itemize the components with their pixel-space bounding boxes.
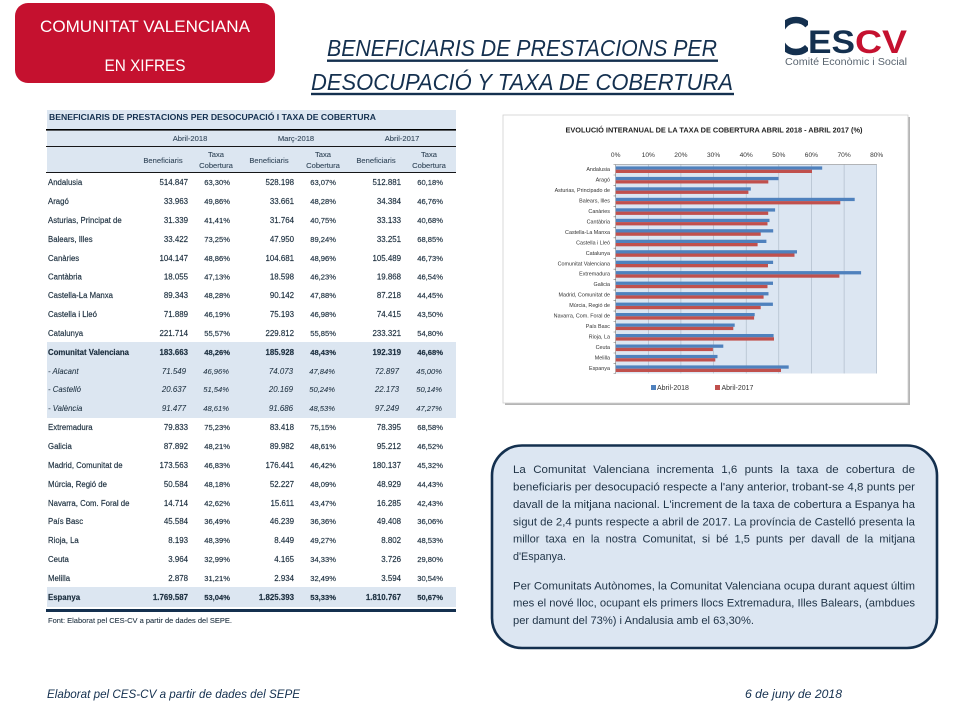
table rows: 46,23% [310, 272, 336, 282]
panel: bar chart [503, 115, 910, 405]
commentary paragraph 2 [513, 580, 915, 627]
table rows: 71.549 [162, 367, 187, 376]
table rows: 32,49% [310, 574, 336, 583]
table rows: 22.173 [374, 385, 400, 394]
table rows: 34.384 [377, 197, 402, 206]
table column headers: Taxa [421, 150, 438, 159]
table rows: 89.343 [164, 291, 189, 300]
table rows: 48,18% [204, 480, 230, 489]
table column headers: Beneficiaris [143, 156, 183, 165]
table rows: Comunitat Valenciana [48, 348, 130, 357]
table rows: 18.055 [164, 272, 189, 282]
table rows: Balears, Illes [48, 235, 93, 244]
table rows: 46,96% [203, 367, 229, 376]
table rows: 55,85% [310, 329, 336, 338]
logo: CES-CV: Comité Econòmic i Social [785, 57, 907, 68]
table rows: 104.681 [265, 254, 294, 263]
table rows: 63,07% [310, 178, 336, 187]
chart category labels: Andalusia [586, 167, 610, 173]
table rows: 48,43% [310, 348, 336, 357]
table rows: 74.415 [377, 310, 402, 319]
table rows: Canàries [48, 254, 79, 263]
table rows: 72.897 [375, 367, 400, 376]
title: DESOCUPACIÓ Y TAXA DE COBERTURA [311, 69, 733, 95]
table rows: 1.825.393 [259, 593, 295, 602]
table rows: 50,67% [417, 593, 443, 602]
table rows: 3.726 [381, 555, 402, 564]
title: BENEFICIARIS DE PRESTACIONS PER [327, 35, 717, 61]
table rows: 1.769.587 [153, 593, 189, 602]
table column headers: Taxa [315, 150, 332, 159]
table rows: 48,26% [204, 348, 230, 357]
table rows: 528.198 [265, 178, 295, 187]
chart axis labels: 20% [674, 152, 688, 159]
badge: Comunitat Valenciana en xifres: COMUNITAT VALENCIANA [40, 17, 251, 36]
chart axis labels [611, 152, 883, 159]
table rows: 221.714 [159, 329, 189, 338]
table rows: 95.212 [377, 442, 401, 451]
table rows: 46,73% [417, 254, 443, 263]
chart category labels [554, 167, 610, 372]
table column headers: Beneficiaris [249, 156, 289, 165]
highlight band: Comunitat Valenciana [47, 342, 456, 418]
chart category labels: Canàries [588, 209, 610, 215]
highlight band: Espanya [47, 587, 456, 607]
table rows: 4.165 [274, 555, 295, 564]
chart category labels: Navarra, Com. Foral de [554, 314, 610, 320]
table rows: 68,85% [417, 235, 443, 244]
table rows: 89.982 [270, 442, 294, 451]
table rows: 31.764 [270, 216, 295, 225]
table column headers: Cobertura [306, 161, 341, 170]
chart category labels: Melilla [595, 356, 610, 362]
table rows: 33.661 [270, 197, 294, 206]
table rows: 18.598 [270, 272, 295, 282]
chart axis labels: 80% [870, 152, 883, 159]
table rows: 74.073 [269, 367, 294, 376]
table rows: 233.321 [372, 329, 401, 338]
footer: date: 6 de juny de 2018 [745, 687, 842, 701]
table rows: 36,36% [310, 517, 336, 526]
table rows: 42,62% [204, 499, 230, 508]
chart category labels: Aragó [596, 178, 610, 184]
table rows: 192.319 [372, 348, 402, 357]
chart axis labels: 10% [642, 152, 655, 159]
table heading: BENEFICIARIS DE PRESTACIONS PER DESOCUPACIÓ I TAXA DE COBERTURA [49, 111, 376, 122]
table rows: 46,19% [204, 310, 230, 319]
table column headers: Abril-2018 [173, 134, 207, 143]
table rows: 176.441 [265, 461, 294, 470]
table rows: 46,54% [417, 272, 443, 282]
table rows [48, 178, 443, 602]
table rows: 8.449 [274, 536, 295, 545]
table rows: 48,86% [204, 254, 230, 263]
table rows: 40,68% [417, 216, 443, 225]
table rows: 43,50% [417, 310, 443, 319]
table rows: Aragó [48, 197, 69, 206]
table rows: 47,88% [310, 291, 336, 300]
chart axis labels: 0% [611, 152, 621, 159]
table rows: 49.408 [377, 517, 402, 526]
table rows: 20.637 [161, 385, 187, 394]
table rows: 52.227 [270, 480, 294, 489]
table rows: Espanya [48, 593, 81, 602]
table rows: Catalunya [48, 329, 84, 338]
panel: commentary text box [492, 446, 937, 648]
table rows: Andalusia [48, 178, 83, 187]
table column headers: Cobertura [412, 161, 447, 170]
chart category labels: Múrcia, Regió de [569, 303, 610, 309]
table rows: 75,15% [310, 423, 336, 432]
table rows: Ceuta [48, 555, 69, 564]
table heading [47, 110, 456, 129]
chart axis labels: 50% [772, 152, 786, 159]
badge: Comunitat Valenciana en xifres: EN XIFRES [104, 56, 186, 75]
commentary paragraph 2: Per Comunitats Autònomes, la Comunitat Valenciana ocupa durant aquest últim [513, 580, 915, 592]
table rows: 36,06% [417, 517, 443, 526]
table rows: 44,45% [417, 291, 443, 300]
chart category labels: Asturias, Principado de [555, 188, 610, 194]
table column headers: Abril-2017 [385, 134, 419, 143]
table rows: 8.193 [168, 536, 189, 545]
table rows: Múrcia, Regió de [48, 480, 107, 489]
table rows: 75,23% [204, 423, 230, 432]
commentary paragraph 2: mes el nové lloc, ocupant els primers llocs Extremadura, Illes Balears, (ambdues [513, 598, 915, 610]
commentary paragraph 1 [513, 464, 916, 563]
table rows: Cantàbria [48, 272, 82, 282]
table column headers: Beneficiaris [356, 156, 396, 165]
table rows: 48,09% [310, 480, 336, 489]
table rows: 46,98% [310, 310, 336, 319]
table rows: 55,57% [204, 329, 230, 338]
table rows: 46.239 [270, 517, 295, 526]
table column headers: Març-2018 [278, 134, 314, 143]
table rows: 33.251 [377, 235, 401, 244]
table rows: 29,80% [417, 555, 443, 564]
table rows: 173.563 [159, 461, 189, 470]
table rows: Castella-La Manxa [48, 291, 114, 300]
table rows: - Alacant [48, 367, 79, 376]
table rows: 8.802 [381, 536, 401, 545]
table rows: 19.868 [377, 272, 402, 282]
table rows: 97.249 [375, 404, 400, 413]
chart legend: Abril-2018 [657, 385, 689, 392]
table rows: 48,21% [204, 442, 230, 451]
table rows: Rioja, La [48, 536, 79, 545]
table rows: 44,43% [417, 480, 443, 489]
table rows: 53,04% [204, 593, 230, 602]
chart category labels: Balears, Illes [579, 198, 610, 204]
table rows: 48,28% [310, 197, 336, 206]
table rows: 16.285 [377, 499, 402, 508]
table rows: 33.133 [377, 216, 402, 225]
commentary paragraph 2: per damunt del 73%) i Andalusia amb el 63,30%. [513, 615, 754, 627]
table rows: 50,14% [416, 385, 442, 394]
table rows: Madrid, Comunitat de [48, 461, 123, 470]
table rows: 68,58% [417, 423, 443, 432]
table rows: 31.339 [164, 216, 189, 225]
table rows: 180.137 [372, 461, 401, 470]
chart category labels: Cantàbria [587, 219, 610, 225]
table rows: 48,61% [310, 442, 336, 451]
table rows: 48,53% [309, 404, 335, 413]
table rows: 42,43% [417, 499, 443, 508]
table rows: 50.584 [164, 480, 189, 489]
commentary paragraph 1: beneficiaris per desocupació respecte a l'any anterior, trobant-se 4,8 punts per [513, 482, 915, 494]
table rows: 90.142 [270, 291, 294, 300]
chart bars: Abril-2018 [616, 166, 861, 369]
table rows: 51,54% [203, 385, 229, 394]
chart category labels: Madrid, Comunitat de [558, 293, 610, 299]
table rows: 105.489 [372, 254, 402, 263]
logo: CES-CV: CV [855, 24, 908, 60]
chart category labels: País Basc [586, 324, 610, 330]
table rows: 33.422 [164, 235, 188, 244]
table column headers: Taxa [208, 150, 225, 159]
table rows: 87.892 [164, 442, 188, 451]
table rows: 71.889 [164, 310, 189, 319]
commentary paragraph 1: sigut de 2,4 punts respecte a abril de 2017. La província de Castelló presenta la [513, 516, 916, 528]
title [311, 35, 734, 95]
table rows: 3.964 [168, 555, 189, 564]
table rows: 47,13% [204, 272, 230, 282]
table rows: 40,75% [310, 216, 336, 225]
table rows: 49,86% [204, 197, 230, 206]
chart category labels: Extremadura [579, 272, 610, 278]
chart bars: Abril-2017 [616, 170, 840, 372]
table rows: 48,53% [417, 536, 443, 545]
commentary paragraph 1: La Comunitat Valenciana incrementa 1,6 punts la taxa de cobertura de [513, 464, 915, 476]
table rows: 104.147 [159, 254, 188, 263]
table rows: 46,76% [417, 197, 443, 206]
table rows: 41,41% [204, 216, 230, 225]
table rows: 46,83% [204, 461, 230, 470]
table rows: País Basc [48, 517, 83, 526]
table rows: 48.929 [377, 480, 402, 489]
table rows: 87.218 [377, 291, 402, 300]
table rows: 46,42% [310, 461, 336, 470]
chart category labels: Catalunya [586, 251, 610, 257]
table rows: 32,99% [204, 555, 230, 564]
table rows: 30,54% [417, 574, 443, 583]
table rows: 48,39% [204, 536, 230, 545]
badge: Comunitat Valenciana en xifres [15, 3, 275, 83]
commentary paragraph 1: d'Espanya. [513, 551, 566, 563]
chart axis labels: 70% [837, 152, 851, 159]
table rows: 73,25% [204, 235, 230, 244]
table rows: 63,30% [204, 178, 230, 187]
panel: data table [46, 110, 456, 625]
table rows: 91.686 [269, 404, 294, 413]
chart category labels: Castella-La Manxa [565, 230, 610, 236]
chart category labels: Castella i Lleó [576, 240, 610, 246]
table rows: 79.833 [164, 423, 189, 432]
table rows: Melilla [48, 574, 71, 583]
table rows: - València [48, 404, 83, 413]
table rows: 91.477 [162, 404, 187, 413]
table rows: 45,00% [416, 367, 442, 376]
table column headers [46, 129, 456, 173]
table column headers: Cobertura [199, 161, 234, 170]
table rows: 47,27% [416, 404, 442, 413]
table rows: 183.663 [159, 348, 189, 357]
table rows: Navarra, Com. Foral de [48, 499, 129, 508]
table rows: 512.881 [372, 178, 401, 187]
table rows: 31,21% [204, 574, 230, 583]
table rows: Extremadura [48, 423, 93, 432]
table rows: 78.395 [377, 423, 402, 432]
table rows: 50,24% [309, 385, 335, 394]
chart legend [651, 385, 754, 392]
table rows: Asturias, Principat de [48, 216, 122, 225]
chart axis labels: 40% [740, 152, 753, 159]
table rows: 54,80% [417, 329, 443, 338]
table rows: 2.934 [274, 574, 295, 583]
footer: source: Elaborat pel CES-CV a partir de dades del SEPE [47, 687, 301, 701]
table rows: 48,61% [203, 404, 229, 413]
table rows: 33.963 [164, 197, 189, 206]
table rows: 60,18% [417, 178, 443, 187]
logo: CES-CV: ES [808, 24, 855, 60]
table rows: 514.847 [159, 178, 188, 187]
table rows: 89,24% [310, 235, 336, 244]
table rows: 229.812 [265, 329, 294, 338]
table rows: 34,33% [310, 555, 336, 564]
table rows: 14.714 [164, 499, 189, 508]
table rows: 46,52% [417, 442, 443, 451]
commentary paragraph 1: millor taxa en la nostra Comunitat, si bé 1,5 punts per davall de la mitjana [513, 534, 916, 546]
table rows: 15.611 [270, 499, 294, 508]
table rows: 49,27% [310, 536, 336, 545]
table rows: 43,47% [310, 499, 336, 508]
chart category labels: Rioja, La [589, 335, 610, 341]
chart category labels: Ceuta [596, 345, 610, 351]
table rows: - Castelló [48, 385, 82, 394]
commentary paragraph 1: davall de la mitjana nacional. L'increment de la taxa de cobertura a Espanya ha [513, 499, 916, 511]
table rows: 48,96% [310, 254, 336, 263]
logo: CES-CV [780, 20, 908, 68]
chart category labels: Galicia [594, 282, 610, 288]
chart category labels: Espanya [589, 366, 610, 372]
chart legend: Abril-2017 [722, 385, 754, 392]
chart title: EVOLUCIÓ INTERANUAL DE LA TAXA DE COBERTURA ABRIL 2018 - ABRIL 2017 (%) [566, 126, 863, 134]
table source note: Font: Elaborat pel CES-CV a partir de dades del SEPE. [48, 616, 232, 625]
table rows: 83.418 [270, 423, 295, 432]
table rows: 47.950 [270, 235, 295, 244]
table rows: 2.878 [168, 574, 189, 583]
table rows: 3.594 [381, 574, 402, 583]
table rows: 75.193 [270, 310, 295, 319]
table rows: 53,33% [310, 593, 336, 602]
table rows: 46,68% [417, 348, 443, 357]
table rows: 45.584 [164, 517, 189, 526]
chart plot area [614, 164, 877, 374]
table rows: 36,49% [204, 517, 230, 526]
table rows: 48,28% [204, 291, 230, 300]
table rows: 45,32% [417, 461, 443, 470]
table rows: 185.928 [265, 348, 295, 357]
chart axis labels: 30% [707, 152, 720, 159]
table rows: 47,84% [309, 367, 335, 376]
chart axis labels: 60% [805, 152, 818, 159]
table rows: 20.169 [268, 385, 294, 394]
table rows: Castella i Lleó [48, 310, 98, 319]
table rows: Galicia [48, 442, 72, 451]
table rows: 1.810.767 [366, 593, 402, 602]
chart category labels: Comunitat Valenciana [558, 261, 610, 267]
